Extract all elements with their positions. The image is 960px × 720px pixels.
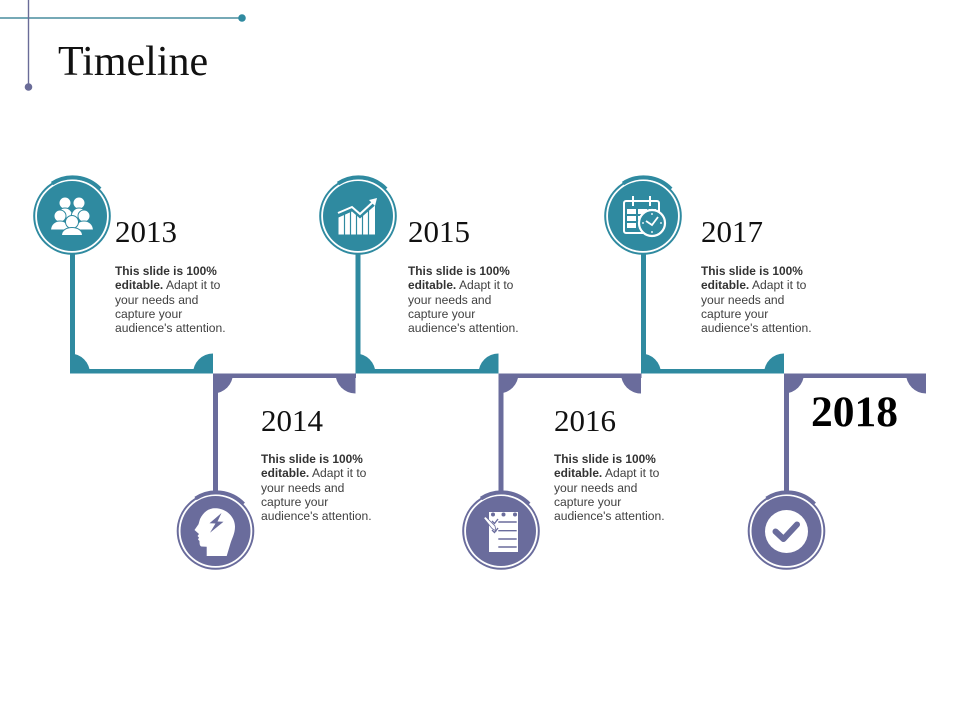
text block 2017: your needs and (701, 293, 784, 307)
text block 2014: editable. Adapt it to (261, 466, 366, 480)
text block 2016: your needs and (554, 481, 637, 495)
text block 2016 (554, 452, 665, 523)
text block 2016: editable. Adapt it to (554, 466, 659, 480)
year 2014: 2014 (261, 403, 323, 438)
icon: calendar with clock (605, 177, 681, 254)
text block 2016: audience's attention. (554, 509, 665, 523)
text block 2015: editable. Adapt it to (408, 278, 513, 292)
year 2018: 2018 (811, 388, 898, 436)
timeline segment 2017 (641, 250, 784, 374)
year 2016: 2016 (554, 403, 616, 438)
text block 2016: capture your (554, 495, 621, 509)
text block 2015: your needs and (408, 293, 491, 307)
text block 2013 (115, 264, 226, 335)
text block 2013: your needs and (115, 293, 198, 307)
text block 2014: your needs and (261, 481, 344, 495)
title: Timeline (58, 39, 208, 85)
icon: bar chart with rising arrow (320, 177, 396, 254)
text block 2013: audience's attention. (115, 321, 226, 335)
text block 2013: This slide is 100% (115, 264, 217, 278)
text block 2017: audience's attention. (701, 321, 812, 335)
icon: notepad checklist (463, 492, 539, 569)
header corner decoration (0, 0, 246, 91)
text block 2017: capture your (701, 307, 768, 321)
icon: check mark (749, 492, 824, 569)
text block 2015: capture your (408, 307, 475, 321)
text block 2013: editable. Adapt it to (115, 278, 220, 292)
timeline segment 2018 (784, 374, 926, 496)
text block 2014 (261, 452, 372, 523)
text block 2014: capture your (261, 495, 328, 509)
text block 2017: This slide is 100% (701, 264, 803, 278)
text block 2015 (408, 264, 519, 335)
text block 2014: audience's attention. (261, 509, 372, 523)
year 2013: 2013 (115, 214, 177, 249)
timeline segment 2016 (498, 374, 642, 496)
year 2015: 2015 (408, 214, 470, 249)
text block 2017: editable. Adapt it to (701, 278, 806, 292)
text block 2013: capture your (115, 307, 182, 321)
icon: people group (34, 177, 110, 254)
text block 2017 (701, 264, 812, 335)
year 2017: 2017 (701, 214, 763, 249)
text block 2015: This slide is 100% (408, 264, 510, 278)
text block 2014: This slide is 100% (261, 452, 363, 466)
text block 2016: This slide is 100% (554, 452, 656, 466)
icon: head with lightning bolt (178, 492, 253, 569)
timeline segment 2014 (213, 374, 356, 496)
timeline segment 2013 (70, 250, 213, 374)
text block 2015: audience's attention. (408, 321, 519, 335)
timeline segment 2015 (356, 250, 498, 374)
